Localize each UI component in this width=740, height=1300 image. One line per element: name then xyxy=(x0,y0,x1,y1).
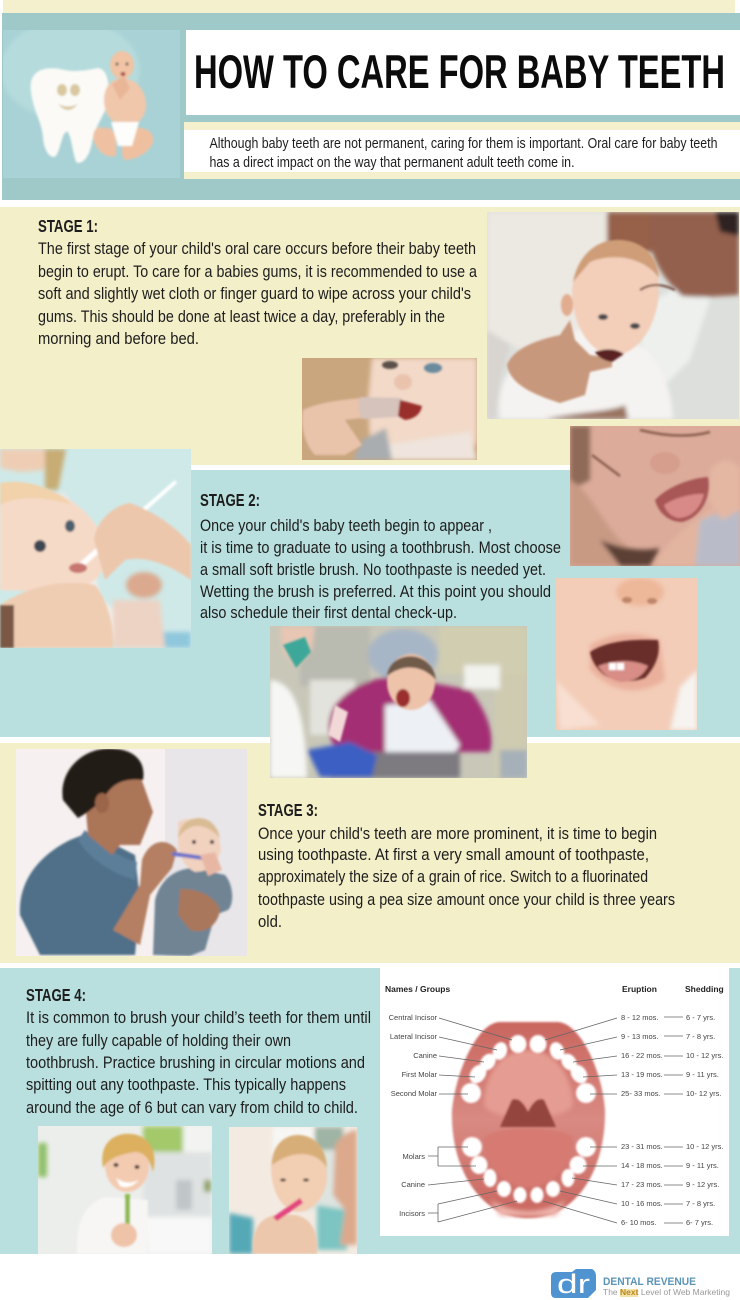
chart labels: Canine xyxy=(401,1180,425,1189)
chart labels xyxy=(385,984,724,1227)
panel: stage 3 xyxy=(0,737,740,963)
chart labels: 6 - 7 yrs. xyxy=(686,1013,715,1022)
chart labels: Incisors xyxy=(399,1209,425,1218)
stage 4 text: around the age of 6 but can vary from child to child. xyxy=(26,1098,358,1117)
photo: toddler with toothbrush at sink xyxy=(38,1126,212,1254)
tooth eruption chart xyxy=(380,968,729,1236)
photo: mouth with first teeth xyxy=(556,578,697,730)
mouth illustration xyxy=(452,1022,605,1218)
chart labels: 9 - 11 yrs. xyxy=(686,1070,719,1079)
chart labels: 6- 7 yrs. xyxy=(686,1218,713,1227)
stage 2 text: Wetting the brush is preferred. At this point you should xyxy=(200,582,551,601)
chart labels: 16 - 22 mos. xyxy=(621,1051,663,1060)
chart labels: 10 - 12 yrs. xyxy=(686,1142,724,1151)
chart labels: 17 - 23 mos. xyxy=(621,1180,663,1189)
chart labels: 8 - 12 mos. xyxy=(621,1013,659,1022)
chart labels: 9 - 12 yrs. xyxy=(686,1180,719,1189)
stage 3 text: STAGE 3: xyxy=(258,800,318,820)
logo: Dental Revenue: The Next Level of Web Marketing xyxy=(603,1287,730,1297)
photo: baby with finger guard xyxy=(302,358,477,460)
stage 4 text: they are fully capable of holding their own xyxy=(26,1031,291,1050)
stage 2 text: also schedule their first dental check-up. xyxy=(200,603,457,622)
photo: parent wiping baby gums with finger guard xyxy=(487,212,739,419)
logo: Dental Revenue: dr xyxy=(557,1269,590,1299)
chart labels: Second Molar xyxy=(391,1089,437,1098)
chart labels: Lateral Incisor xyxy=(390,1032,437,1041)
chart labels: 23 - 31 mos. xyxy=(621,1142,663,1151)
stage 4 text: spitting out any toothpaste. This typically happens xyxy=(26,1075,346,1094)
chart labels: 25- 33 mos. xyxy=(621,1089,661,1098)
chart labels: Shedding xyxy=(685,984,724,994)
chart labels: 9 - 13 mos. xyxy=(621,1032,659,1041)
stage 1 text: morning and before bed. xyxy=(38,329,199,348)
chart labels: Central Incisor xyxy=(389,1013,437,1022)
stage 3 text: Once your child's teeth are more prominent, it is time to begin xyxy=(258,824,657,843)
chart labels: 7 - 8 yrs. xyxy=(686,1032,715,1041)
chart labels: 10 - 12 yrs. xyxy=(686,1051,724,1060)
logo: Dental Revenue xyxy=(551,1269,730,1299)
stage 3 text xyxy=(258,800,675,931)
panel: stage 1 xyxy=(0,207,740,465)
stage 3 text: toothpaste using a pea size amount once your child is three years xyxy=(258,890,675,909)
chart labels: 9 - 11 yrs. xyxy=(686,1161,719,1170)
stage 2 text: a small soft bristle brush. No toothpaste is needed yet. xyxy=(200,560,546,579)
stage 4 text: STAGE 4: xyxy=(26,985,86,1005)
stage 4 text: It is common to brush your child’s teeth for them until xyxy=(26,1008,371,1027)
stage 2 text: it is time to graduate to using a toothbrush. Most choose xyxy=(200,538,561,557)
stage 1 text xyxy=(38,216,477,348)
stage 3 text: using toothpaste. At first a very small amount of toothpaste, xyxy=(258,845,649,864)
photo: father brushing child's teeth xyxy=(16,749,247,956)
stage 3 text: old. xyxy=(258,912,282,931)
chart labels: Names / Groups xyxy=(385,984,450,994)
stage 4 text xyxy=(26,985,371,1117)
stage 2 text: STAGE 2: xyxy=(200,490,260,510)
photo: baby gums cleaned with swab xyxy=(0,449,191,648)
panel: stage 4 xyxy=(0,968,740,1254)
chart labels: Canine xyxy=(413,1051,437,1060)
stage 1 text: begin to erupt. To care for a babies gums, it is recommended to use a xyxy=(38,262,477,281)
stage 2 text xyxy=(200,490,561,622)
panel: stage 2 xyxy=(0,465,740,737)
intro text xyxy=(210,135,718,171)
chart labels: First Molar xyxy=(402,1070,437,1079)
intro text: has a direct impact on the way that permanent adult teeth come in. xyxy=(210,154,574,171)
photo: crying baby xyxy=(570,426,740,566)
logo: Dental Revenue: DENTAL REVENUE xyxy=(603,1276,696,1288)
stage 1 text: gums. This should be done at least twice a day, preferably in the xyxy=(38,307,445,326)
chart labels: 10- 12 yrs. xyxy=(686,1089,721,1098)
chart labels: Molars xyxy=(402,1152,425,1161)
leader lines xyxy=(428,1017,683,1223)
photo: baby in dental chair xyxy=(270,626,527,778)
chart labels: 7 - 8 yrs. xyxy=(686,1199,715,1208)
stage 1 text: soft and slightly wet cloth or finger guard to wipe across your child's xyxy=(38,284,471,303)
stage 3 text: approximately the size of a grain of rice. Switch to a fluorinated xyxy=(258,867,648,886)
header band xyxy=(2,0,740,200)
chart labels: 13 - 19 mos. xyxy=(621,1070,663,1079)
stage 4 text: toothbrush. Practice brushing in circular motions and xyxy=(26,1053,365,1072)
chart labels: 10 - 16 mos. xyxy=(621,1199,663,1208)
chart labels: 14 - 18 mos. xyxy=(621,1161,663,1170)
chart labels: Eruption xyxy=(622,984,657,994)
stage 1 text: STAGE 1: xyxy=(38,216,98,236)
chart labels: 6- 10 mos. xyxy=(621,1218,656,1227)
photo: tooth mascot and baby xyxy=(0,20,180,178)
stage 2 text: Once your child's baby teeth begin to appear , xyxy=(200,516,492,535)
stage 1 text: The first stage of your child's oral care occurs before their baby teeth xyxy=(38,239,476,258)
photo: toddler brushing with parent xyxy=(229,1127,357,1254)
